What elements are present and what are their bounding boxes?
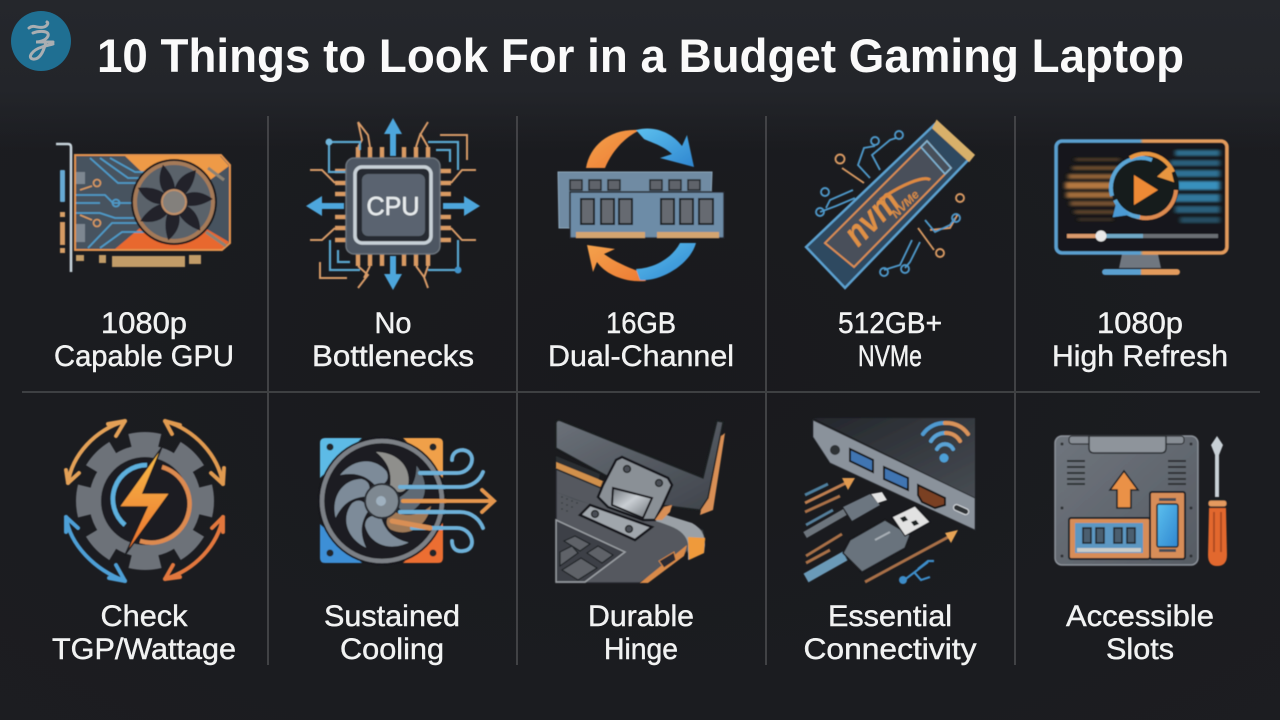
icon: CPU <box>306 118 480 290</box>
logo badge <box>11 11 71 71</box>
grid dividers <box>22 116 1260 665</box>
label: Check TGP/Wattage: Check <box>100 600 189 633</box>
label: 512GB+ NVMe: NVMe <box>858 340 922 373</box>
icon: NVMe SSD: NVMe <box>888 187 922 221</box>
label: Sustained Cooling: Sustained <box>324 600 460 633</box>
icon: cooling fan <box>318 437 494 565</box>
label: Durable Hinge <box>588 600 694 666</box>
label: 1080p Capable GPU: 1080p <box>101 307 187 340</box>
label: Essential Connectivity: Essential <box>828 600 952 633</box>
label: 16GB Dual-Channel <box>548 307 734 373</box>
screwdriver <box>1208 436 1227 566</box>
label: 1080p High Refresh: High Refresh <box>1052 340 1228 373</box>
label: No Bottlenecks <box>312 307 474 373</box>
title: 10 Things to Look For in a Budget Gaming Laptop <box>97 29 1184 82</box>
icon: laptop hinge <box>556 420 725 583</box>
icon: CPU: CPU <box>366 191 420 221</box>
label: Check TGP/Wattage <box>52 600 236 666</box>
label: 512GB+ NVMe <box>838 307 942 373</box>
label: Sustained Cooling <box>324 600 460 666</box>
icon: NVMe SSD <box>806 122 973 288</box>
icon: gear with lightning <box>66 421 224 581</box>
label: Accessible Slots: Accessible <box>1066 600 1214 633</box>
label: Essential Connectivity: Connectivity <box>804 633 976 666</box>
label: Accessible Slots <box>1066 600 1214 666</box>
icon: NVMe SSD: nvm <box>835 181 908 254</box>
icon: accessible slots panel <box>1055 436 1227 566</box>
label: 1080p Capable GPU <box>54 307 234 373</box>
label: 1080p Capable GPU: Capable GPU <box>54 340 234 373</box>
label: Durable Hinge: Durable <box>588 600 694 633</box>
label: 16GB Dual-Channel: 16GB <box>606 307 676 340</box>
icon: laptop ports and cables <box>805 418 975 584</box>
label: Accessible Slots: Slots <box>1106 633 1174 666</box>
icon: graphics card <box>56 144 230 272</box>
label: 512GB+ NVMe: 512GB+ <box>838 307 942 340</box>
label: No Bottlenecks: No <box>374 307 412 340</box>
label: Check TGP/Wattage: TGP/Wattage <box>52 633 236 666</box>
label: Sustained Cooling: Cooling <box>340 633 444 666</box>
label: No Bottlenecks: Bottlenecks <box>312 340 474 373</box>
label: Essential Connectivity <box>804 600 976 666</box>
label: 1080p High Refresh: 1080p <box>1097 307 1183 340</box>
label: 16GB Dual-Channel: Dual-Channel <box>548 340 734 373</box>
label: 1080p High Refresh <box>1052 307 1228 373</box>
icon: RAM with arrows <box>558 128 724 281</box>
label: Durable Hinge: Hinge <box>604 633 678 666</box>
icon: monitor <box>1056 141 1227 275</box>
